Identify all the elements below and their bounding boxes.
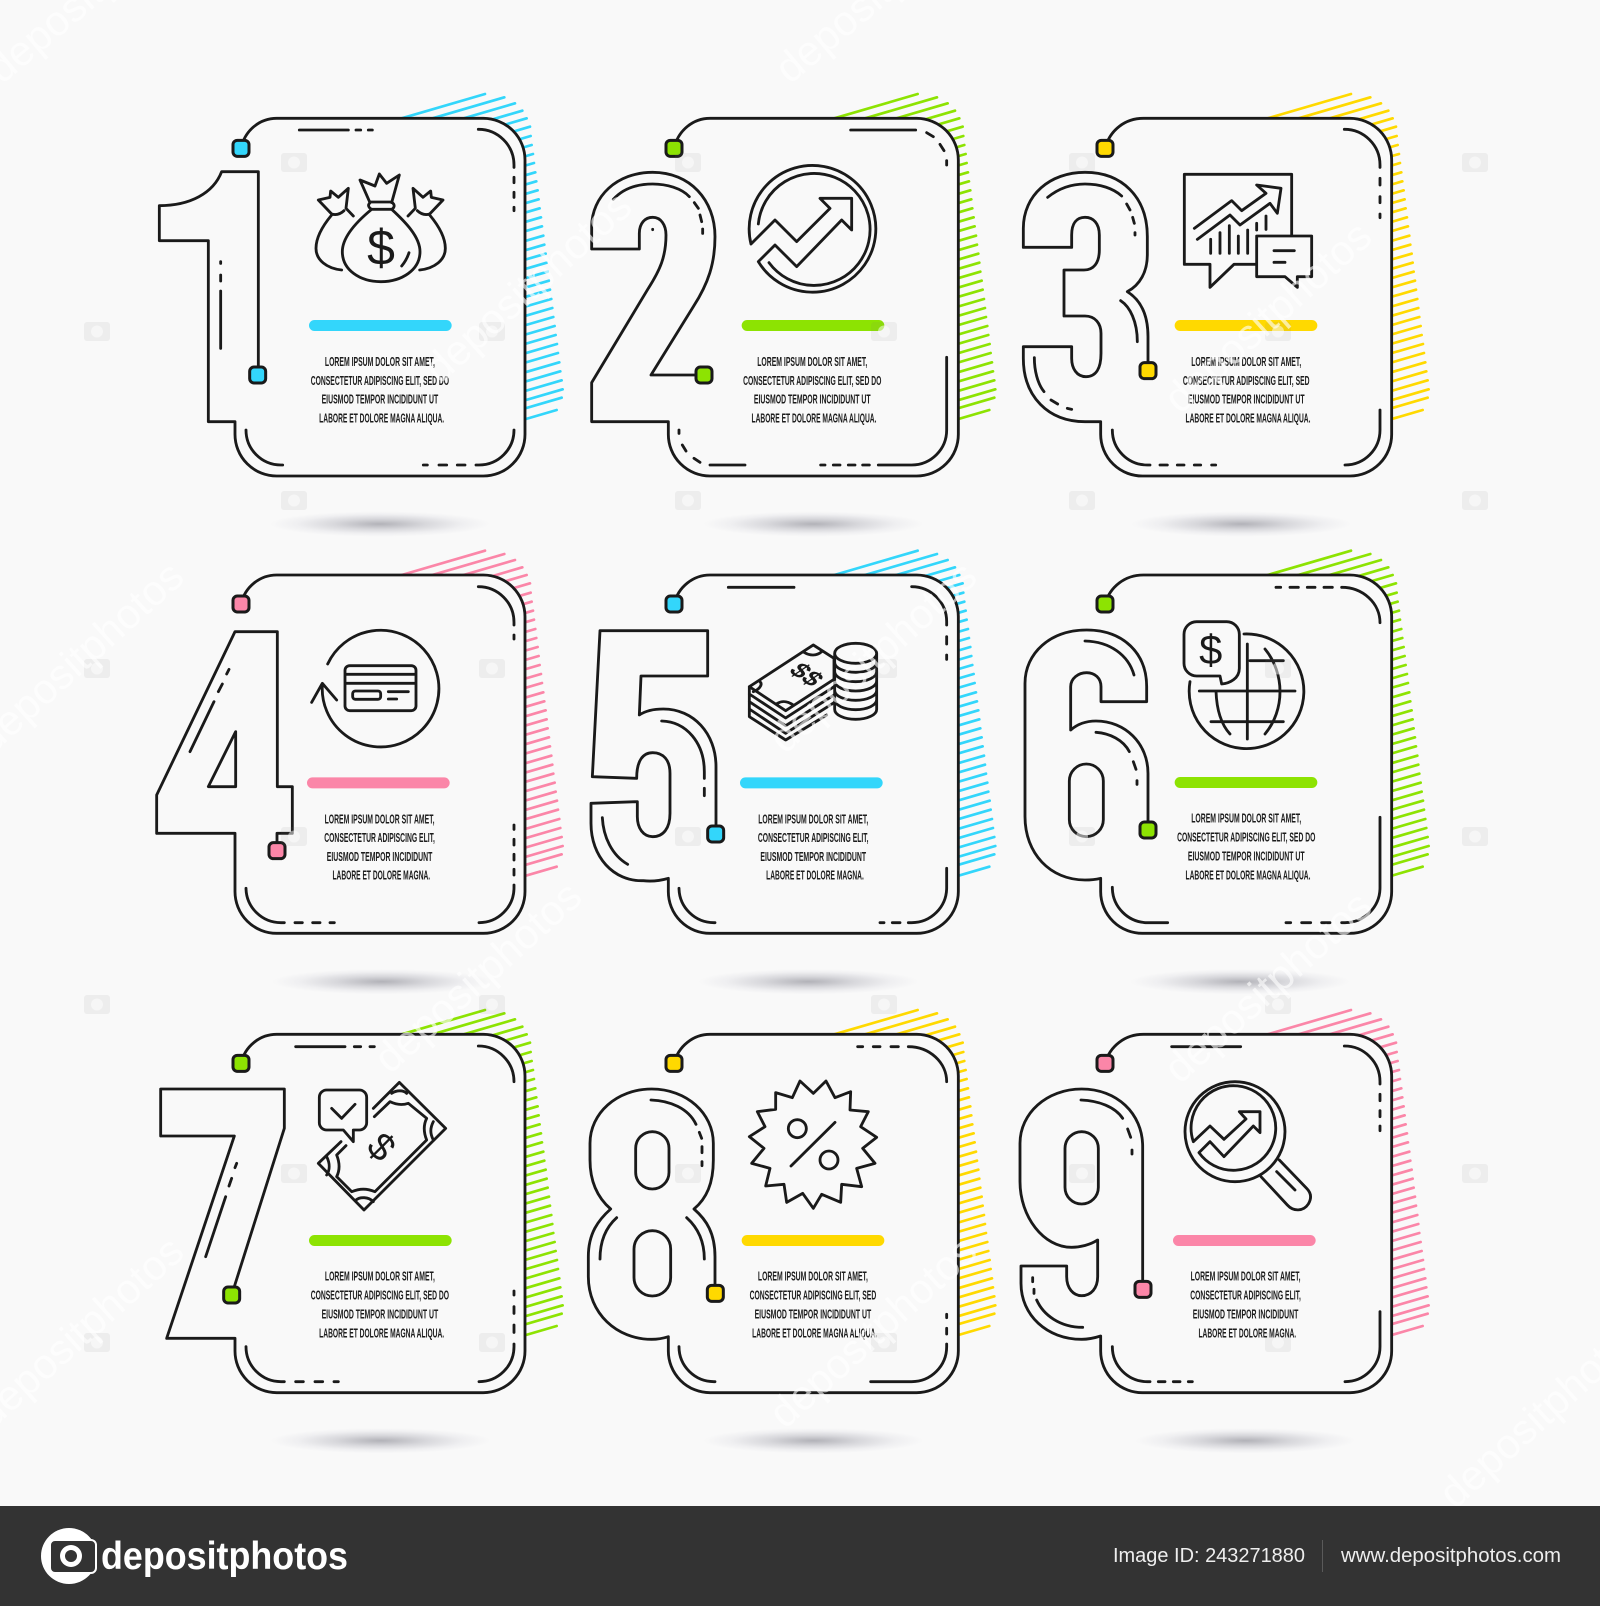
panel 4: card refresh [157, 551, 563, 994]
icon: money bags: $ [367, 219, 395, 275]
digit 3 and frame [1023, 118, 1392, 476]
description 2: LOREM IPSUM DOLOR SIT AMET, [757, 355, 867, 369]
end dot 1 [250, 367, 266, 383]
frame accents 9 [1033, 1046, 1380, 1382]
panel 9: chart search [1020, 1010, 1429, 1453]
card fill 9 [1101, 1034, 1391, 1393]
stripes 8 [834, 1010, 995, 1350]
description 8: CONSECTETUR ADIPISCING ELIT, SED [750, 1289, 876, 1303]
panel 7: approved payment [161, 1010, 563, 1453]
digit 6 and frame [1025, 575, 1392, 933]
icon: percent starburst [749, 1081, 877, 1208]
shadow 2 [703, 511, 923, 537]
description 3: EIUSMOD TEMPOR INCIDIDUNT UT [1188, 393, 1305, 407]
description 7: LABORE ET DOLORE MAGNA ALIQUA. [319, 1326, 444, 1340]
progress bar 8 [742, 1235, 884, 1246]
digit 8 and frame [588, 1034, 958, 1393]
progress bar 3 [1175, 320, 1317, 331]
description 1: EIUSMOD TEMPOR INCIDIDUNT UT [322, 393, 438, 407]
end dot 3 [1140, 363, 1156, 379]
description 5: LABORE ET DOLORE MAGNA. [766, 869, 864, 883]
digit 9 and frame [1020, 1034, 1392, 1393]
panel 2: chart coin [592, 94, 995, 537]
digit 2 and frame [592, 118, 958, 476]
end dot 2 [696, 367, 712, 383]
description 3: LOREM IPSUM DOLOR SIT AMET, [1191, 355, 1301, 369]
description 8: EIUSMOD TEMPOR INCIDIDUNT UT [755, 1307, 871, 1321]
icon: banknotes and coin stack: $$ [782, 659, 829, 691]
end dot 6 [1140, 822, 1156, 838]
footer bar [0, 1506, 1600, 1606]
stripes 4 [402, 551, 563, 891]
description 4: LOREM IPSUM DOLOR SIT AMET, [325, 812, 435, 826]
digit 7 and frame [161, 1034, 525, 1393]
icon: globe with dollar bubble [1184, 622, 1304, 749]
start dot 7 [233, 1055, 249, 1071]
watermarks: depositphotos [365, 872, 590, 1082]
panel 8: discount [588, 1010, 995, 1453]
icon: magnifier with chart [1185, 1082, 1311, 1210]
image id: Image ID: 243271880 [1113, 1545, 1305, 1567]
icon: banknote with approval bubble: $ [358, 1125, 404, 1170]
description 7: CONSECTETUR ADIPISCING ELIT, SED DO [311, 1289, 449, 1303]
digit 1 and frame [159, 118, 525, 476]
shadow 5 [698, 969, 918, 994]
digit 5 and frame [591, 575, 958, 933]
end dot 9 [1135, 1281, 1151, 1297]
watermarks: depositphotos [415, 182, 640, 392]
shadow 6 [1130, 969, 1350, 994]
shadow 8 [703, 1428, 923, 1453]
description 1: LABORE ET DOLORE MAGNA ALIQUA. [319, 412, 444, 426]
shadow 9 [1135, 1428, 1355, 1453]
description 2: LABORE ET DOLORE MAGNA ALIQUA. [751, 412, 876, 426]
card fill 6 [1101, 575, 1391, 933]
description 7: EIUSMOD TEMPOR INCIDIDUNT UT [322, 1307, 438, 1321]
stripes 3 [1268, 94, 1429, 434]
description 5: CONSECTETUR ADIPISCING ELIT, [758, 831, 869, 845]
end dot 8 [707, 1285, 723, 1301]
icon: growth chart coin [749, 165, 876, 292]
start dot 6 [1097, 596, 1113, 612]
stripes 2 [834, 94, 995, 434]
icon: money bags [316, 174, 445, 282]
description 6: CONSECTETUR ADIPISCING ELIT, SED DO [1177, 831, 1315, 845]
card fill 7 [235, 1034, 525, 1393]
description 6: LOREM IPSUM DOLOR SIT AMET, [1191, 812, 1301, 826]
description 4: LABORE ET DOLORE MAGNA. [332, 869, 430, 883]
panel 1: money bags [159, 94, 563, 537]
frame accents 1 [221, 129, 514, 465]
stripes 6 [1268, 551, 1429, 891]
description 2: EIUSMOD TEMPOR INCIDIDUNT UT [754, 393, 871, 407]
frame accents 4 [190, 587, 514, 923]
icon: globe with dollar bubble: $ [1199, 626, 1222, 673]
start dot 2 [666, 140, 682, 156]
description 5: LOREM IPSUM DOLOR SIT AMET, [758, 812, 868, 826]
icon: banknote with approval bubble [318, 1082, 446, 1210]
card fill 4 [235, 575, 525, 933]
start dot 4 [233, 596, 249, 612]
description 7: LOREM IPSUM DOLOR SIT AMET, [325, 1270, 435, 1284]
description 8: LOREM IPSUM DOLOR SIT AMET, [758, 1270, 868, 1284]
watermarks: depositphotos [760, 1227, 985, 1437]
watermark cameras [84, 153, 1488, 1352]
divider [1322, 1540, 1323, 1572]
panel 5: cash and coins [591, 551, 995, 994]
stripes 1 [402, 94, 563, 434]
stripes 9 [1268, 1010, 1429, 1350]
logo mark [41, 1528, 97, 1584]
progress bar 7 [309, 1235, 452, 1246]
start dot 5 [666, 596, 682, 612]
logo wordmark: depositphotos [101, 1535, 348, 1578]
shadow 7 [271, 1428, 491, 1453]
description 3: CONSECTETUR ADIPISCING ELIT, SED [1183, 374, 1310, 388]
description 8: LABORE ET DOLORE MAGNA ALIQUA. [752, 1326, 877, 1340]
frame accents 2 [613, 130, 947, 465]
card fill 1 [235, 118, 525, 476]
shadow 1 [270, 511, 490, 537]
stripes 7 [402, 1010, 563, 1350]
description 2: CONSECTETUR ADIPISCING ELIT, SED DO [743, 374, 881, 388]
shadow 3 [1131, 511, 1351, 537]
icon: chart speech bubbles [1184, 174, 1312, 287]
description 6: LABORE ET DOLORE MAGNA ALIQUA. [1185, 868, 1310, 882]
panel 6: world money [1025, 551, 1429, 994]
progress bar 9 [1173, 1235, 1316, 1246]
progress bar 5 [740, 777, 883, 788]
description 1: CONSECTETUR ADIPISCING ELIT, SED DO [311, 374, 449, 388]
frame accents 5 [602, 587, 947, 923]
icon: credit card refresh [312, 630, 439, 747]
description 4: CONSECTETUR ADIPISCING ELIT, [324, 831, 435, 845]
watermarks: depositphotos [760, 552, 985, 762]
digit 4 and frame [157, 575, 525, 933]
description 9: LABORE ET DOLORE MAGNA. [1198, 1326, 1296, 1340]
start dot 1 [233, 140, 249, 156]
description 9: LOREM IPSUM DOLOR SIT AMET, [1191, 1270, 1301, 1284]
frame accents 3 [1034, 129, 1380, 465]
description 6: EIUSMOD TEMPOR INCIDIDUNT UT [1188, 849, 1305, 863]
card fill 5 [668, 575, 958, 933]
icon: banknotes and coin stack [749, 643, 877, 740]
progress bar 4 [307, 777, 450, 788]
description 9: CONSECTETUR ADIPISCING ELIT, [1190, 1289, 1301, 1303]
card fill 2 [668, 118, 958, 476]
start dot 9 [1097, 1055, 1113, 1071]
progress bar 1 [309, 320, 452, 331]
shadow 4 [272, 969, 492, 994]
panel 3: presentation chat [1023, 94, 1429, 537]
frame accents 8 [600, 1047, 947, 1382]
description 3: LABORE ET DOLORE MAGNA ALIQUA. [1185, 412, 1310, 426]
card fill 8 [668, 1034, 958, 1393]
watermarks: depositphotos [1155, 882, 1380, 1092]
watermarks: depositphotos [1155, 212, 1380, 422]
progress bar 6 [1175, 777, 1317, 788]
end dot 5 [708, 826, 724, 842]
description 9: EIUSMOD TEMPOR INCIDIDUNT [1193, 1307, 1299, 1321]
progress bar 2 [742, 320, 884, 331]
start dot 3 [1097, 140, 1113, 156]
description 4: EIUSMOD TEMPOR INCIDIDUNT [327, 850, 433, 864]
card fill 3 [1101, 118, 1391, 476]
stripes 5 [834, 551, 995, 891]
description 1: LOREM IPSUM DOLOR SIT AMET, [325, 355, 435, 369]
end dot 4 [269, 843, 285, 859]
start dot 8 [666, 1055, 682, 1071]
site url: www.depositphotos.com [1340, 1545, 1561, 1567]
description 5: EIUSMOD TEMPOR INCIDIDUNT [760, 850, 866, 864]
end dot 7 [224, 1287, 240, 1303]
frame accents 7 [206, 1046, 514, 1382]
frame accents 6 [1085, 587, 1380, 923]
